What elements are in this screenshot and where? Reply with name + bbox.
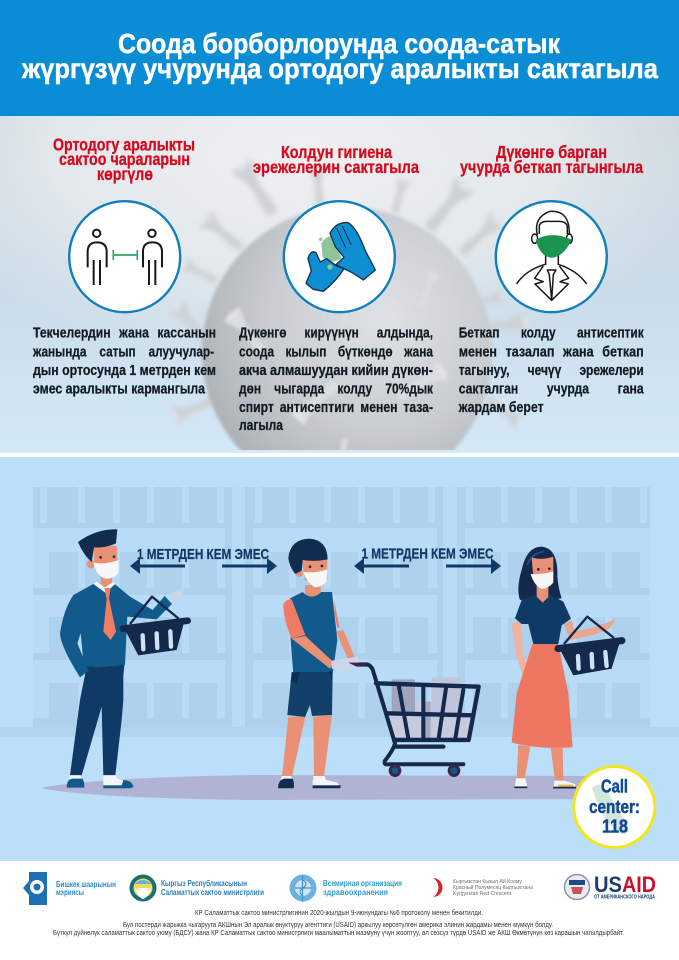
text: mask instructions (458, 326, 644, 416)
floor shadow (40, 775, 600, 800)
arrow: left (130, 558, 185, 574)
call center text: Call (601, 776, 628, 796)
icon: gloved hands with sanitizer (284, 201, 395, 312)
call center badge (574, 766, 655, 848)
distance label right: 1 МЕТРДЕН КЕМ ЭМЕС (362, 546, 494, 562)
logo: Kyrgyz Ministry of Health (130, 874, 264, 902)
store shelves background (0, 487, 679, 737)
footer notes: КР Саламаттык сактоо министрлигинин 2020-жылдын 9-июнундагы №6 протоколу менен бекитилди. (195, 909, 483, 917)
shopping cart (348, 663, 479, 777)
heading: wear a mask: Дүкөнгө барган (496, 142, 607, 162)
text: distance instructions: Текчелердин жана кассанын (33, 326, 216, 342)
boy with shopping cart (278, 539, 362, 788)
panel: safety rules (0, 116, 679, 450)
heading: wear a mask: учурда беткап тагынгыла (460, 157, 643, 177)
logo: Red Crescent: Кыргызстан Кызыл Ай Коому (453, 878, 522, 885)
man with basket (60, 529, 188, 788)
icon: phone watermark (592, 784, 628, 834)
text: hygiene instructions: дөн чыгарда колду 70%дык (239, 382, 434, 398)
footer notes (53, 909, 624, 937)
panel: store scene (0, 457, 679, 861)
text: hygiene instructions: спирт антисептиги менен таза- (239, 400, 433, 416)
heading: hand hygiene: эрежелерин сактагыла (253, 157, 419, 177)
heading: wear a mask (460, 142, 643, 177)
heading: keep distance: сактоо чараларын (59, 149, 190, 169)
heading: keep distance: Ортодогу аралыкты (53, 134, 195, 154)
distance label right (354, 546, 501, 574)
heading: hand hygiene: Колдун гигиена (281, 142, 392, 162)
logo: USAID (564, 872, 656, 900)
logo: Bishkek mayor's office: Бишкек шаарынын (56, 879, 116, 889)
woman with basket (512, 547, 622, 788)
text: distance instructions: дын ортосунда 1 метрден кем (33, 363, 216, 379)
footer (0, 861, 679, 960)
arrow: right (446, 558, 501, 574)
logo: Red Crescent: Красный Полумесяц Кыргызстана (453, 884, 534, 891)
text: mask instructions: менен тазалап жана беткап (459, 344, 644, 360)
logo: Kyrgyz Ministry of Health: Кыргыз Республикасынын (161, 878, 247, 888)
text: mask instructions: сакталган учурда гана (459, 382, 644, 398)
logo: Red Crescent: Kyrgyzstan Red Crescent (453, 891, 511, 897)
call center text: center: (589, 797, 640, 817)
text: distance instructions (32, 326, 216, 398)
arrow: left (354, 558, 409, 574)
footer notes: Бул постерди жарыкка чыгарууга АКШнын Эл аралык өнүктүрүү агенттиги (USAID) аркылуу көрсөтүлгөн америка элинин жардамы менен мүмкүн болду. (123, 921, 553, 929)
text: hygiene instructions (239, 326, 434, 434)
icon: person wearing a mask (496, 201, 607, 312)
call center text (589, 776, 640, 836)
text: distance instructions: жанында сатып алуучулар- (32, 344, 214, 360)
virus illustration (170, 159, 528, 450)
text: distance instructions: эмес аралыкты кармангыла (33, 382, 206, 398)
logo: Bishkek mayor's office: мэриясы (56, 887, 84, 897)
text: mask instructions: тагынуу, чечүү эрежелери (459, 363, 644, 379)
distance label left: 1 МЕТРДЕН КЕМ ЭМЕС (137, 546, 269, 563)
logo: Bishkek mayor's office (23, 872, 116, 905)
logo: USAID: AID (622, 872, 656, 897)
title (21, 28, 658, 84)
call center text: 118 (602, 816, 628, 836)
title: Соода борборлорунда соода-сатык (118, 28, 561, 59)
distance label left (130, 546, 277, 574)
text: hygiene instructions: Дүкөнгө кирүүнүн алдында, (239, 326, 433, 342)
logo: Red Crescent (433, 878, 534, 897)
text: hygiene instructions: соода кылып бүткөндө жана (239, 344, 434, 360)
text: mask instructions: жардам берет (458, 400, 544, 416)
logo: WHO (290, 874, 402, 902)
text: mask instructions: Беткап колду антисептик (459, 326, 644, 342)
text: hygiene instructions: акча алмашуудан кийин дүкөн- (239, 363, 433, 379)
logo: WHO: Всемирная организация (323, 878, 402, 888)
heading: keep distance (53, 134, 195, 184)
logo: WHO: здравоохранения (323, 887, 388, 897)
logo: USAID: US (594, 872, 622, 897)
arrow: right (222, 558, 277, 574)
logo: Kyrgyz Ministry of Health: Саламаттык сактоо министрлиги (161, 887, 264, 897)
heading: keep distance: көргүлө (97, 164, 153, 184)
icon: two people at a distance (69, 201, 180, 312)
heading: hand hygiene (253, 142, 419, 177)
logo: USAID: ОТ АМЕРИКАНСКОГО НАРОДА (594, 894, 655, 900)
text: hygiene instructions: лагыла (239, 418, 284, 434)
header band (0, 0, 679, 116)
